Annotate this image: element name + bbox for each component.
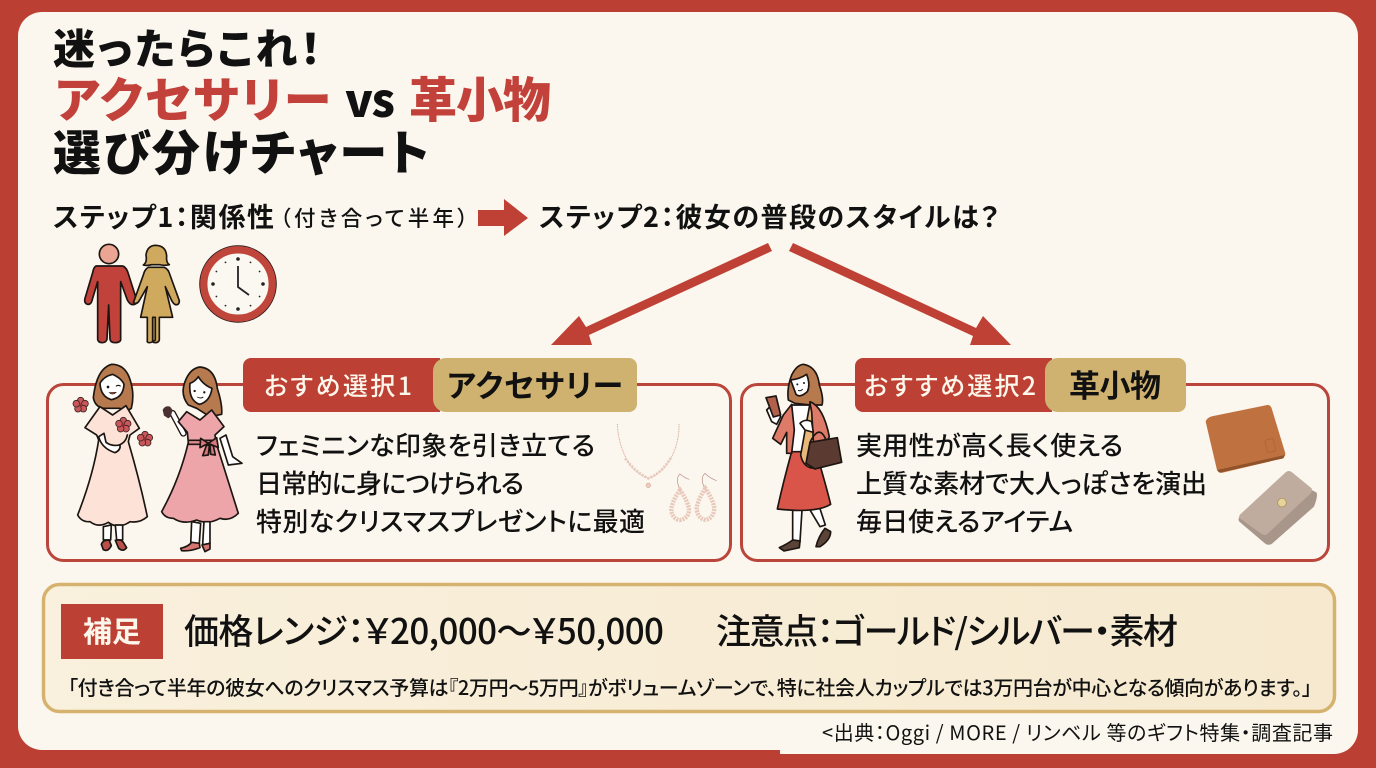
panel: choice 2 leather goods xyxy=(742,358,1328,560)
badge: supplement: 補足 xyxy=(83,609,141,651)
arrow: step 1 to step 2 xyxy=(478,199,528,236)
icon: couple holding hands xyxy=(85,244,179,343)
step 1 heading: ステップ1：関係性 xyxy=(53,196,274,235)
icon: brown wallet xyxy=(1206,405,1285,473)
step 1 heading: （付き合って半年） xyxy=(280,202,468,233)
benefit list: 上質な素材で大人っぽさを演出 xyxy=(856,464,1207,501)
title line 1: 迷ったらこれ！ xyxy=(53,16,321,77)
illustration: two women in dresses xyxy=(73,364,242,552)
source note: <出典：Oggi / MORE / リンベル 等のギフト特集・調査記事 xyxy=(822,717,1333,746)
arrow: branch to choice 2 xyxy=(789,243,1011,345)
title line 2: accessory vs leather goods: vs xyxy=(345,65,395,131)
benefit list: 日常的に身につけられる xyxy=(256,464,524,501)
benefit list: フェミニンな印象を引き立てる xyxy=(256,426,595,463)
panel border xyxy=(742,384,1328,560)
tag: recommended choice 1 xyxy=(243,358,440,412)
benefit list: 毎日使えるアイテム xyxy=(856,502,1073,539)
panel: choice 1 accessories xyxy=(48,358,730,560)
arrow: branch to choice 1 xyxy=(551,243,772,345)
step 2 heading: ステップ2：彼女の普段のスタイルは？ xyxy=(539,196,999,235)
badge: supplement xyxy=(61,604,163,659)
title line 3: 選び分けチャート xyxy=(53,114,429,184)
illustration: woman with phone and bag xyxy=(766,364,842,551)
title line 2: accessory vs leather goods: アクセサリー xyxy=(55,61,331,131)
icon: clock xyxy=(200,246,276,322)
supplement box xyxy=(44,584,1334,712)
woman with flowers xyxy=(73,364,153,550)
tag: recommended choice 2 xyxy=(855,358,1052,412)
tag: recommended choice 1: おすめ選択1 xyxy=(264,367,412,403)
icon: necklace xyxy=(617,424,679,488)
tag: recommended choice 2: おすすめ選択2 xyxy=(864,367,1036,403)
title line 2: accessory vs leather goods: 革小物 xyxy=(409,61,551,131)
tag: leather goods xyxy=(1045,358,1186,412)
price range: 価格レンジ：￥20,000～￥50,000 xyxy=(184,604,664,655)
title xyxy=(53,16,551,184)
benefit list xyxy=(256,426,645,539)
step 1 heading xyxy=(53,196,468,235)
tag: accessories: アクセサリー xyxy=(447,361,623,406)
benefit list: 特別なクリスマスプレゼントに最適 xyxy=(256,502,645,539)
panel border xyxy=(48,384,730,560)
woman waving xyxy=(162,367,242,552)
benefit list xyxy=(856,426,1207,539)
title line 2: accessory vs leather goods xyxy=(55,61,551,131)
benefit list: 実用性が高く長く使える xyxy=(856,426,1123,463)
budget note: 「付き合って半年の彼女へのクリスマス予算は『2万円～5万円』がボリュームゾーンで、特に社会人カップルでは3万円台が中心となる傾向があります。」 xyxy=(68,672,1312,701)
cautions: 注意点：ゴールド/シルバー・素材 xyxy=(716,604,1178,655)
icon: earrings xyxy=(671,473,717,520)
icon: taupe key case xyxy=(1238,471,1317,545)
panel: supplement xyxy=(44,584,1334,712)
tag: leather goods: 革小物 xyxy=(1069,361,1161,406)
